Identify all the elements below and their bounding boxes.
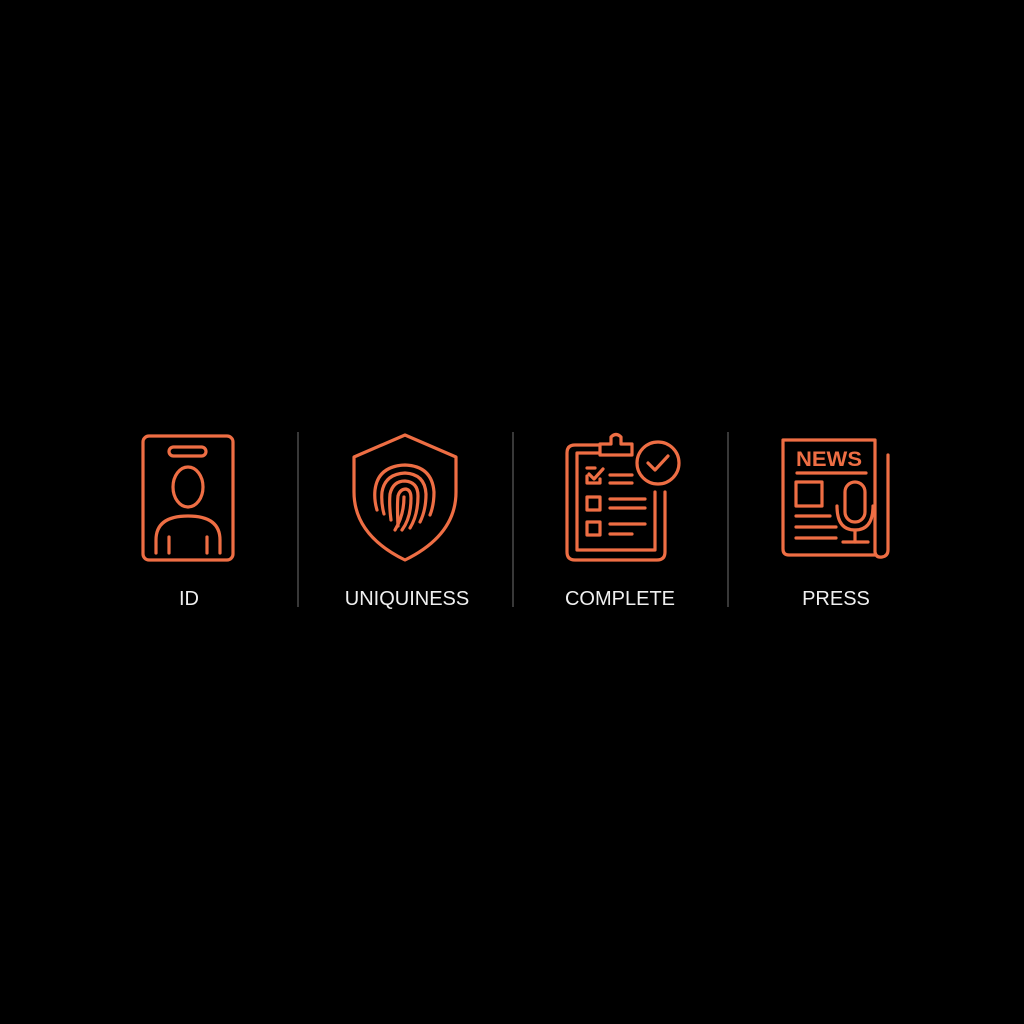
icon: ID card [143,436,233,560]
icon: newspaper: NEWS [796,448,862,471]
icon: shield fingerprint [354,435,456,560]
label: PRESS: PRESS [802,588,870,610]
label: ID: ID [179,588,199,610]
icon: clipboard [567,434,679,560]
label: UNIQUINESS: UNIQUINESS [345,588,469,610]
icon: newspaper [783,440,888,557]
label: COMPLETE: COMPLETE [565,588,675,610]
